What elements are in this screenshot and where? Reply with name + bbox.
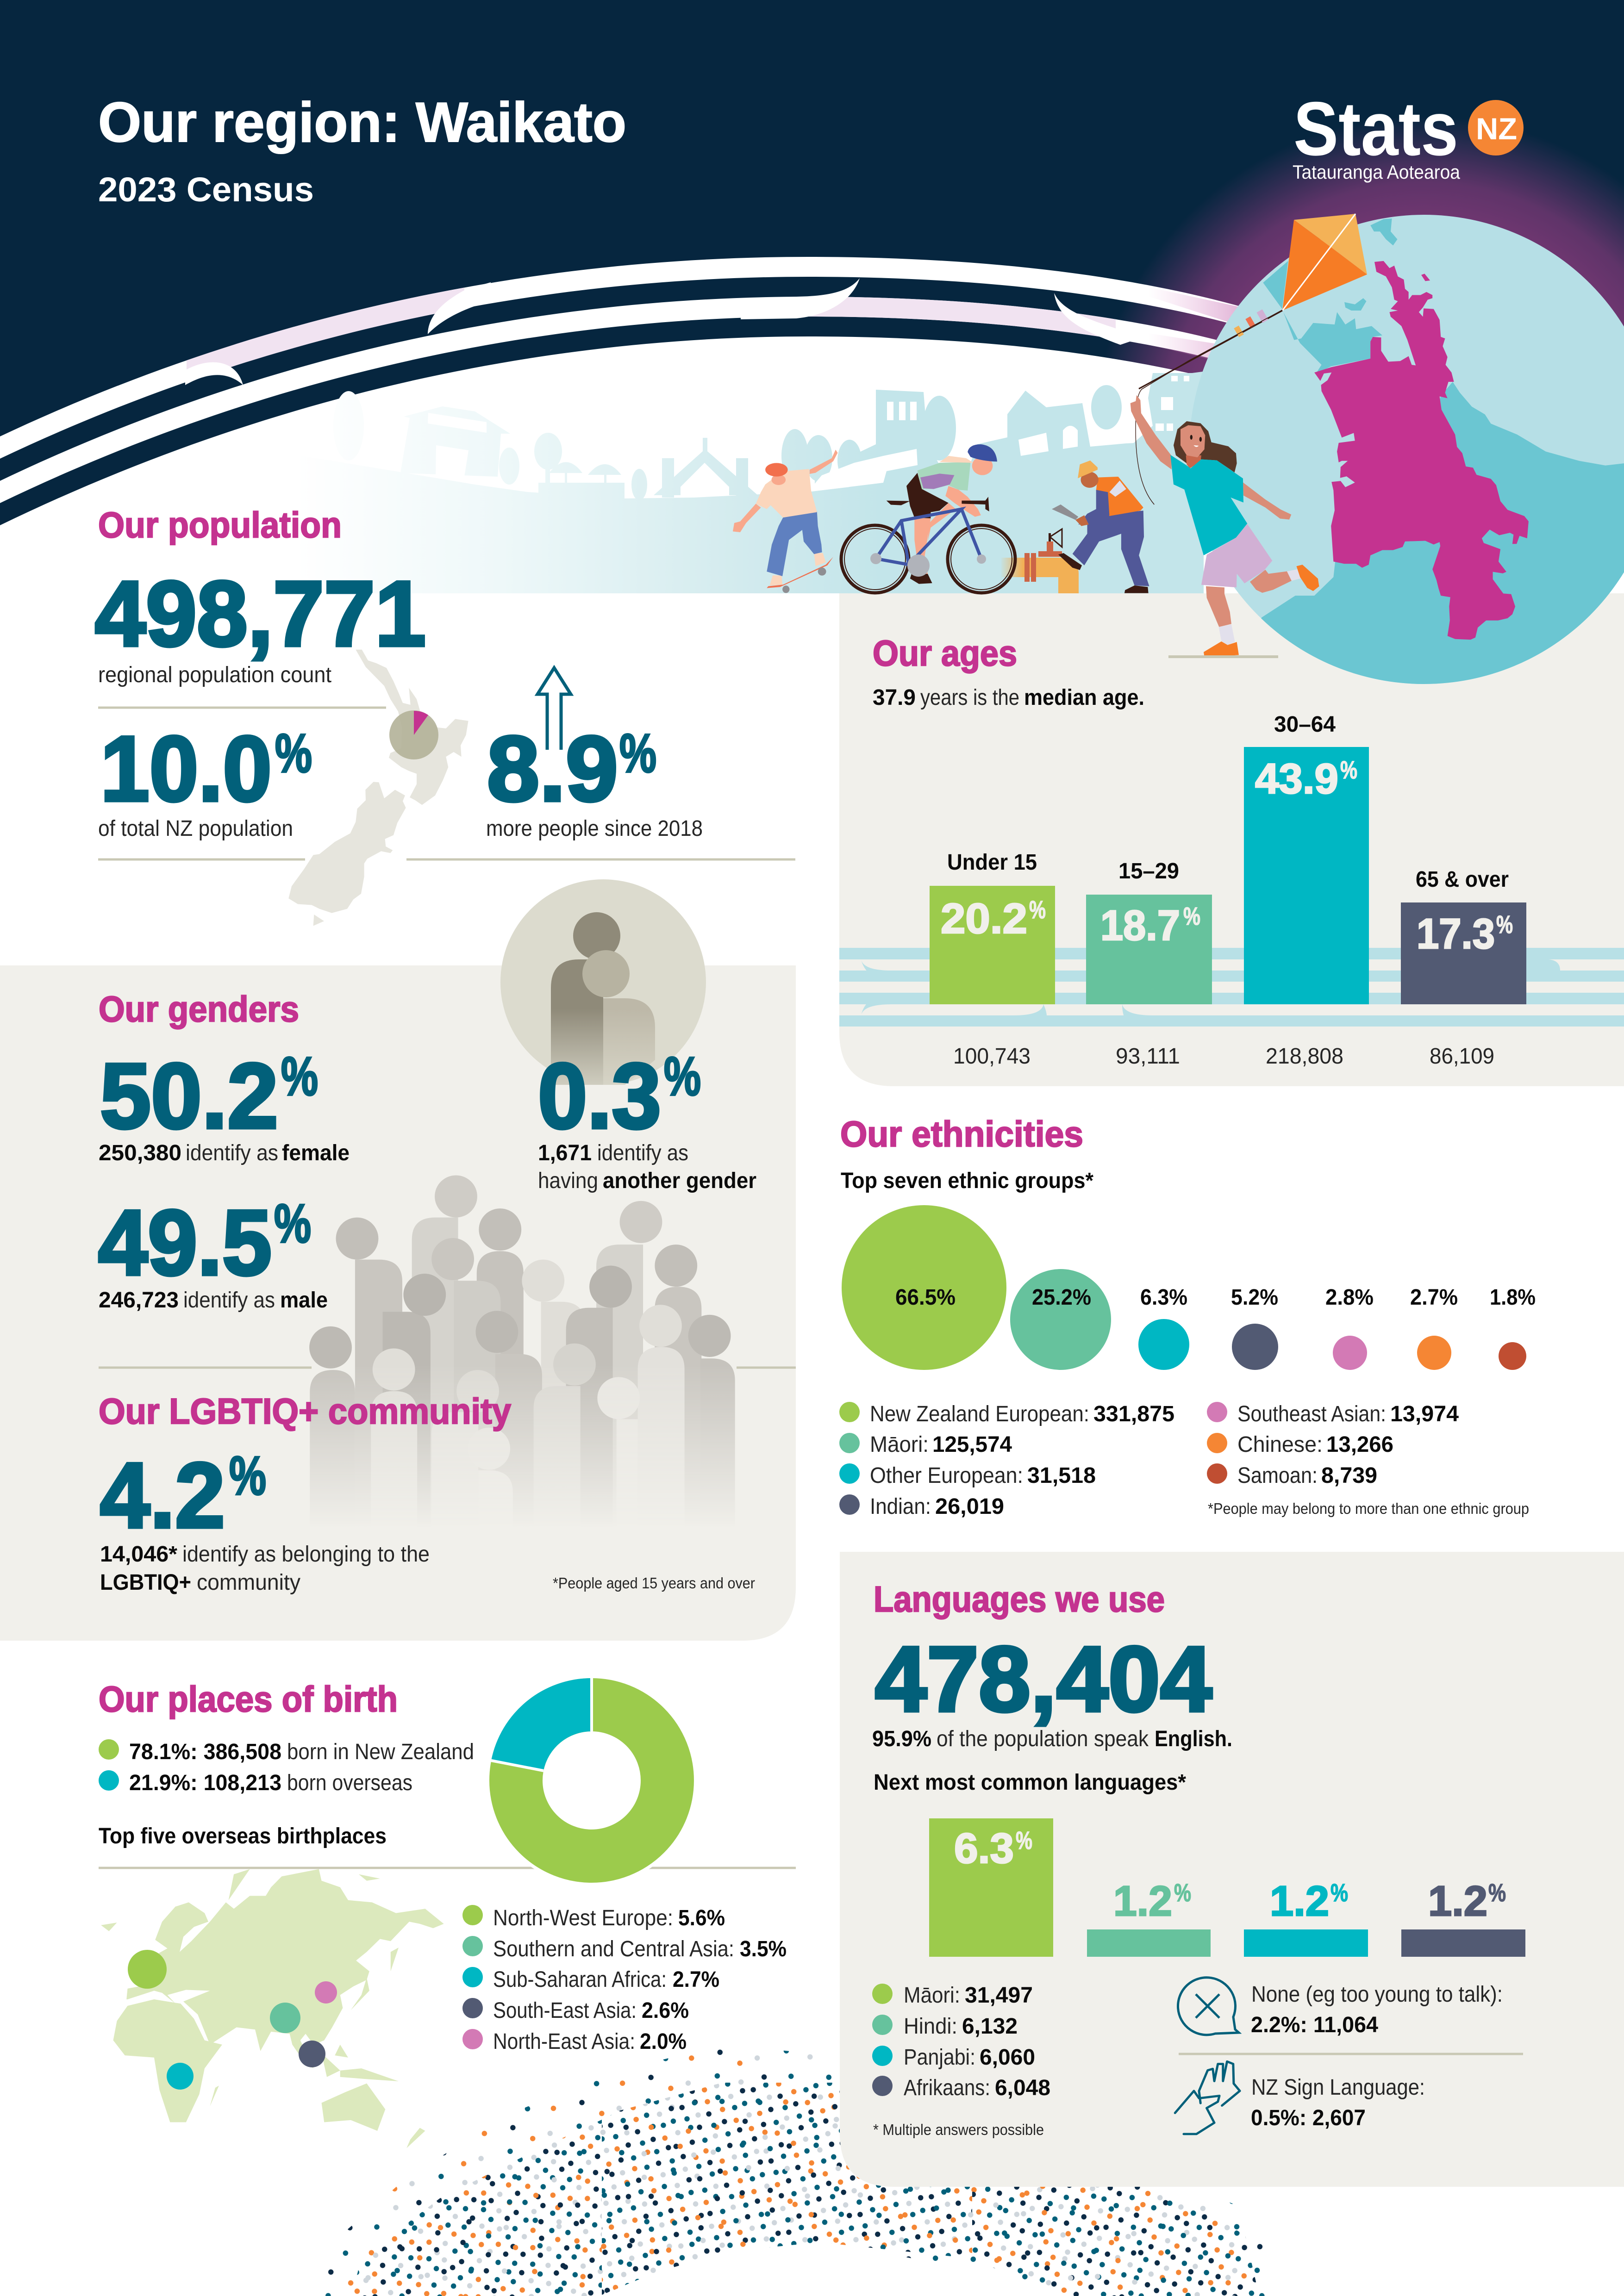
none text bbox=[1251, 1982, 1503, 2037]
map: world bbox=[101, 1869, 444, 2148]
globe land top-left bbox=[1263, 261, 1288, 309]
legend: left column: Other European: bbox=[870, 1463, 1023, 1488]
illustration: crowd of people bbox=[309, 1176, 735, 1528]
legend: languages: 31,497 bbox=[965, 1983, 1033, 2008]
stat: 10.0%: 10.0 bbox=[100, 717, 272, 821]
section: our ethnicities bbox=[839, 1114, 1536, 1519]
birthplace legend: Southern and Central Asia: bbox=[493, 1937, 734, 1961]
map markers bbox=[128, 1950, 337, 2090]
legend: languages: 6,060 bbox=[980, 2045, 1035, 2070]
median age: years is the bbox=[920, 685, 1019, 710]
donut chart bbox=[486, 1675, 697, 1886]
worker bbox=[1052, 460, 1149, 593]
bar: 65 and over: 86,109 bbox=[1430, 1044, 1494, 1069]
legend: right column: Samoan: bbox=[1237, 1463, 1318, 1488]
logo: Stats NZ: NZ bbox=[1476, 112, 1517, 146]
LGBTIQ+ count: identify as belonging to the bbox=[182, 1542, 430, 1567]
stat: 4.2%: 4.2 bbox=[100, 1444, 225, 1547]
legend: left column: 31,518 bbox=[1027, 1463, 1096, 1488]
legend: left column: 26,019 bbox=[935, 1494, 1004, 1519]
stat: 50.2%: % bbox=[281, 1046, 318, 1107]
bar: Afrikaans: % bbox=[1488, 1879, 1506, 1907]
English share bbox=[872, 1727, 1232, 1751]
legend: left column: 331,875 bbox=[1093, 1402, 1174, 1426]
section: languages we use bbox=[872, 1579, 1525, 2138]
wave stripes bbox=[839, 948, 1624, 1027]
heading: Languages we use bbox=[874, 1579, 1165, 1619]
bar: 15-29: 93,111 bbox=[1116, 1044, 1180, 1069]
birthplace legend: North-East Asia: bbox=[493, 2029, 635, 2054]
bar: Māori: % bbox=[1016, 1827, 1032, 1854]
title: Our region: Waikato bbox=[98, 91, 626, 154]
dotted decoration bbox=[319, 2045, 1278, 2296]
divider bbox=[99, 1867, 796, 1869]
header arcs bbox=[0, 257, 1238, 503]
bar: 15-29: 18.7 bbox=[1100, 902, 1180, 949]
glow around globe bbox=[1088, 122, 1624, 373]
bar: Panjabi bbox=[1244, 1878, 1368, 1957]
birthplace legend: 2.6% bbox=[642, 1998, 689, 2023]
divider bbox=[98, 706, 386, 709]
LGBTIQ+ count: community bbox=[197, 1570, 300, 1595]
panel: our ages background bbox=[839, 593, 1624, 1086]
bar: 30-64: % bbox=[1340, 756, 1357, 784]
bar: 65 and over bbox=[1401, 867, 1526, 1069]
legend: left column: 125,574 bbox=[932, 1432, 1012, 1457]
bar: 15-29: % bbox=[1183, 902, 1200, 930]
stat label: more people since 2018 bbox=[486, 816, 703, 841]
median age: 37.9 bbox=[873, 685, 916, 710]
male count bbox=[99, 1288, 328, 1313]
stat: 49.5%: % bbox=[274, 1193, 311, 1254]
heading: Our genders bbox=[99, 989, 299, 1029]
stat: 0.3%: % bbox=[664, 1046, 701, 1107]
stat: 49.5%: 49.5 bbox=[98, 1191, 272, 1294]
icon: person circle bbox=[500, 879, 706, 1085]
legend: left column bbox=[839, 1402, 1174, 1519]
bar: 30-64: 30–64 bbox=[1274, 712, 1336, 737]
bubble chart: 2.8% bbox=[1325, 1285, 1374, 1310]
birthplace legend: 2.0% bbox=[640, 2029, 687, 2054]
another gender count bbox=[538, 1141, 756, 1193]
birthplace legend: 5.6% bbox=[678, 1906, 725, 1930]
bar: under 15 bbox=[930, 850, 1055, 1069]
bar: 15-29: 15–29 bbox=[1118, 859, 1179, 884]
subtitle: 2023 Census bbox=[98, 170, 314, 209]
icon: sign language hands bbox=[1175, 2061, 1240, 2134]
birthplace legend: Sub-Saharan Africa: bbox=[493, 1967, 667, 1992]
male count: identify as bbox=[183, 1288, 275, 1313]
bubble chart: 1.8% bbox=[1490, 1285, 1536, 1310]
legend: languages: 6,048 bbox=[995, 2076, 1050, 2100]
NZ sign language text: 0.5%: 2,607 bbox=[1251, 2106, 1366, 2130]
logo: Stats NZ: Stats bbox=[1293, 86, 1458, 171]
icon: girl's raised shoe bbox=[1296, 565, 1319, 591]
LGBTIQ+ count: 14,046* bbox=[100, 1542, 177, 1567]
globe bbox=[1185, 211, 1624, 690]
map: New Zealand bbox=[288, 650, 468, 926]
birthplace legend: 3.5% bbox=[740, 1937, 787, 1961]
bubble chart: 66.5% bbox=[895, 1285, 956, 1310]
panel: genders and LGBTIQ background bbox=[0, 965, 796, 1641]
bar: Hindi bbox=[1087, 1878, 1211, 1957]
town windows bbox=[428, 376, 1189, 495]
another gender count: identify as bbox=[597, 1141, 688, 1165]
legend: overseas born bbox=[99, 1770, 412, 1795]
bubble chart bbox=[842, 1205, 1536, 1370]
stat: 0.3%: 0.3 bbox=[538, 1045, 661, 1148]
heading: Our ethnicities bbox=[840, 1114, 1083, 1154]
bar: 65 and over: % bbox=[1496, 911, 1513, 939]
legend: languages: Panjabi: bbox=[904, 2045, 975, 2070]
globe land north-west bbox=[1283, 312, 1382, 374]
logo: Stats NZ: Tatauranga Aotearoa bbox=[1293, 161, 1461, 183]
bar: Panjabi: % bbox=[1330, 1879, 1348, 1907]
birthplace legend: North-West Europe: bbox=[493, 1906, 673, 1930]
median age: median age. bbox=[1024, 685, 1144, 710]
bar: 30-64: 218,808 bbox=[1266, 1044, 1343, 1069]
population count: 498,771 bbox=[95, 562, 426, 666]
section: our places of birth bbox=[99, 1675, 796, 2148]
ground line under girl bbox=[1168, 655, 1278, 658]
population label: regional population count bbox=[98, 663, 331, 687]
English share: 95.9% bbox=[872, 1727, 931, 1751]
legend: right column: Southeast Asian: bbox=[1237, 1402, 1386, 1426]
female count: identify as bbox=[186, 1141, 278, 1165]
male count: male bbox=[280, 1288, 328, 1313]
legend: languages: Afrikaans: bbox=[904, 2076, 990, 2100]
bar: under 15: 100,743 bbox=[953, 1044, 1031, 1069]
female count: 250,380 bbox=[99, 1141, 181, 1165]
another gender count: having bbox=[538, 1169, 598, 1193]
bar: Māori bbox=[929, 1818, 1053, 1957]
birthplace legend: South-East Asia: bbox=[493, 1998, 637, 2023]
legend: right column: 8,739 bbox=[1321, 1463, 1377, 1488]
NZ sign language text bbox=[1251, 2075, 1425, 2130]
stat: 4.2%: % bbox=[229, 1445, 266, 1506]
birthplace legend: 2.7% bbox=[673, 1967, 719, 1992]
subheading: Next most common languages* bbox=[874, 1770, 1186, 1795]
footnote: *People aged 15 years and over bbox=[553, 1574, 755, 1592]
legend: left column: Māori: bbox=[870, 1432, 929, 1457]
median age bbox=[873, 685, 1144, 710]
none text: 2.2%: 11,064 bbox=[1251, 2013, 1378, 2037]
heading: Our LGBTIQ+ community bbox=[99, 1391, 511, 1431]
illustration: girl with kite bbox=[1131, 310, 1303, 657]
heading: Our places of birth bbox=[99, 1679, 398, 1719]
stat: 50.2%: 50.2 bbox=[100, 1045, 278, 1148]
bar: under 15: 20.2 bbox=[941, 895, 1027, 942]
legend: left column: New Zealand European: bbox=[870, 1402, 1089, 1426]
female count: female bbox=[282, 1141, 350, 1165]
LGBTIQ+ count bbox=[100, 1542, 430, 1595]
bar: Māori: 6.3 bbox=[954, 1825, 1014, 1872]
section: our population bbox=[95, 504, 795, 926]
Waikato region map bbox=[1314, 261, 1529, 640]
icon: bicycle wheels and frame bbox=[841, 509, 1015, 593]
town silhouette and ground bbox=[296, 370, 1213, 593]
legend: languages: 6,132 bbox=[962, 2014, 1018, 2039]
panel: languages background bbox=[840, 1552, 1624, 2187]
birthplace legend bbox=[462, 1905, 787, 2054]
section: our genders bbox=[98, 989, 756, 1313]
divider bbox=[1179, 2053, 1523, 2055]
legend: right column: 13,266 bbox=[1326, 1432, 1393, 1457]
legend: overseas born: born overseas bbox=[287, 1771, 412, 1795]
bubble chart: 2.7% bbox=[1410, 1285, 1458, 1310]
bar: under 15: Under 15 bbox=[947, 850, 1037, 875]
bubble chart: 6.3% bbox=[1140, 1285, 1187, 1310]
legend: left column: Indian: bbox=[870, 1494, 931, 1519]
legend: NZ born: born in New Zealand bbox=[287, 1740, 474, 1764]
arrow: up bbox=[537, 668, 571, 750]
bubble chart: 25.2% bbox=[1032, 1285, 1091, 1310]
bar: under 15: % bbox=[1029, 896, 1046, 924]
divider bbox=[98, 858, 795, 861]
another gender count: 1,671 bbox=[538, 1141, 592, 1165]
legend: languages: Māori: bbox=[904, 1983, 960, 2008]
globe small island bbox=[1421, 274, 1430, 281]
bubble chart: 5.2% bbox=[1231, 1285, 1278, 1310]
illustration: skater, cyclist, worker bbox=[733, 444, 997, 593]
icon: speech bubble with X bbox=[1178, 1978, 1239, 2035]
stat: 8.9%: 8.9 bbox=[487, 717, 618, 821]
bar: Afrikaans bbox=[1401, 1878, 1525, 1957]
heading: Our population bbox=[98, 504, 342, 545]
pipe bbox=[1001, 529, 1079, 593]
NZ sign language text: NZ Sign Language: bbox=[1251, 2075, 1425, 2100]
section: LGBTIQ+ community bbox=[99, 1391, 755, 1595]
cyclist bbox=[887, 444, 997, 584]
globe island bbox=[1370, 218, 1397, 245]
bar: 65 and over: 17.3 bbox=[1417, 910, 1495, 958]
section: our ages bbox=[839, 633, 1624, 1069]
subheading: Top five overseas birthplaces bbox=[99, 1824, 387, 1848]
stat: 8.9%: % bbox=[619, 723, 656, 784]
globe dark sea bbox=[1261, 382, 1624, 684]
legend: right column bbox=[1207, 1402, 1459, 1488]
stat label: of total NZ population bbox=[98, 816, 293, 841]
legend: languages: Hindi: bbox=[904, 2014, 957, 2039]
kite bbox=[1139, 214, 1367, 389]
LGBTIQ+ count: LGBTIQ+ bbox=[100, 1570, 191, 1595]
bar: Panjabi: 1.2 bbox=[1270, 1878, 1329, 1925]
bar: 65 and over: 65 & over bbox=[1416, 867, 1509, 892]
another gender count: another gender bbox=[603, 1169, 756, 1193]
legend: right column: 13,974 bbox=[1390, 1402, 1459, 1426]
none text: None (eg too young to talk): bbox=[1251, 1982, 1503, 2007]
bar: Hindi: % bbox=[1174, 1879, 1191, 1907]
title bbox=[98, 91, 626, 209]
legend: languages bbox=[872, 1983, 1050, 2100]
legend: NZ born: 78.1%: 386,508 bbox=[129, 1740, 281, 1764]
panel: navy header background bbox=[0, 0, 1624, 525]
footnote: * Multiple answers possible bbox=[873, 2121, 1044, 2138]
legend: NZ born bbox=[99, 1739, 474, 1764]
legend: overseas born: 21.9%: 108,213 bbox=[129, 1771, 281, 1795]
footnote: *People may belong to more than one ethnic group bbox=[1208, 1500, 1529, 1517]
bar: 30-64 bbox=[1244, 712, 1369, 1069]
legend: right column: Chinese: bbox=[1237, 1432, 1323, 1457]
male count: 246,723 bbox=[99, 1288, 179, 1313]
globe island 2 bbox=[1344, 298, 1366, 311]
stat: 10.0%: % bbox=[275, 723, 312, 784]
English share: of the population speak bbox=[937, 1727, 1149, 1751]
English speakers count: 478,404 bbox=[875, 1628, 1212, 1731]
bar: 30-64: 43.9 bbox=[1255, 755, 1338, 803]
heading: Our ages bbox=[873, 633, 1017, 673]
female count bbox=[99, 1141, 350, 1165]
skater bbox=[733, 450, 837, 593]
section divider bbox=[99, 1366, 796, 1369]
English share: English. bbox=[1155, 1727, 1232, 1751]
bar: Afrikaans: 1.2 bbox=[1428, 1878, 1487, 1925]
bar: 15-29 bbox=[1086, 859, 1212, 1069]
bar: Hindi: 1.2 bbox=[1113, 1878, 1172, 1925]
subheading: Top seven ethnic groups* bbox=[841, 1169, 1093, 1193]
